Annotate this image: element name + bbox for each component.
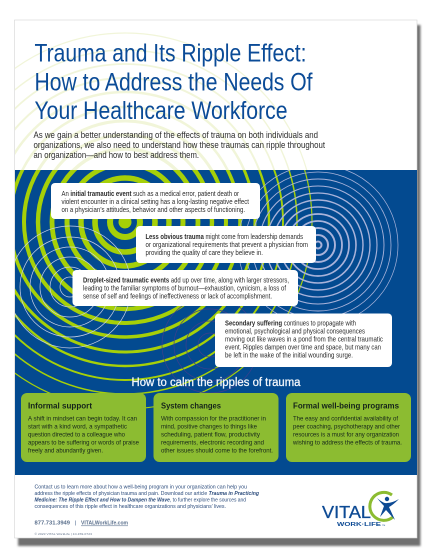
card: less obvious trauma — [136, 226, 316, 263]
footer phone and website — [34, 520, 128, 526]
box: formal well-being programs: resources is a must for any organization — [293, 432, 399, 438]
logo: Vital WorkLife: VITAL — [322, 502, 371, 522]
card: secondary suffering — [215, 314, 392, 367]
box: system changes: With compassion for the practitioner in — [161, 416, 266, 422]
card: initial traumatic event: An initial tramautic event such as a medical error, patient death or — [62, 189, 239, 198]
box: informal support — [21, 393, 146, 462]
box: system changes: System changes — [161, 400, 221, 410]
card: less obvious trauma: or organizational requirements that prevent a physician from — [146, 240, 308, 249]
footer contact text: Contact us to learn more about how a well-being program in your organization can help you — [34, 484, 247, 490]
footer phone and website: VITALWorkLife.com — [81, 520, 128, 526]
heading: how to calm: How to calm the ripples of trauma — [132, 375, 301, 389]
box: system changes: requirements, electronic recording and — [161, 440, 264, 446]
card: secondary suffering: be left in the wake of the initial wounding surge. — [225, 350, 353, 360]
box: formal well-being programs: peer coaching, psychotherapy and other — [293, 424, 401, 430]
card: droplet-sized traumatic events: leading to the familiar symptoms of burnout—exhaustion, cynicism, a loss of — [83, 284, 287, 292]
footer contact text — [34, 484, 260, 510]
box: formal well-being programs — [286, 393, 411, 462]
blue ripple panel — [15, 170, 417, 475]
card: secondary suffering: moving out like waves in a pond from the central traumatic — [225, 334, 383, 344]
copyright: © 2023 VITAL WorkLife | 10-159-0723 — [34, 532, 93, 536]
intro text: As we gain a better understanding of the effects of trauma on both individuals and — [34, 130, 318, 140]
footer contact text: consequences of this ripple effect in healthcare organizations and physicians’ lives. — [34, 504, 226, 510]
box: informal support: appears to be suffering or words of praise — [28, 440, 139, 446]
intro text: an organization—and how to best address them. — [34, 150, 199, 160]
box: informal support: Informal support — [28, 400, 92, 410]
box: formal well-being programs: The easy and confidential availability of — [293, 416, 398, 422]
box: informal support: question directed to a colleague who — [28, 432, 125, 438]
pale ripple rings, left — [9, 226, 131, 348]
logo: Vital WorkLife: TM — [382, 525, 385, 527]
box: formal well-being programs: wishing to address the effects of trauma. — [292, 440, 402, 446]
box: system changes: scheduling, patient flow, productivity — [161, 432, 261, 438]
card: initial traumatic event: on a physician’s attitudes, behavior and other aspects of functioning. — [62, 205, 245, 214]
card: less obvious trauma: Less obvious trauma might come from leadership demands — [146, 232, 303, 241]
title — [34, 40, 313, 125]
box: informal support: start with a kind word, a sympathetic — [28, 424, 128, 430]
box: system changes: other issues should come to the forefront. — [161, 448, 273, 454]
card: droplet-sized traumatic events: sense of self and feelings of ineffectiveness or lack of accomplishment. — [83, 292, 272, 300]
box: informal support: A shift in mindset can begin today. It can — [28, 416, 137, 422]
footer contact text: address the ripple effects of physician trauma and pain. Download our article Trauma in Practicing — [34, 491, 260, 497]
logo: Vital WorkLife — [322, 492, 399, 528]
card: initial traumatic event — [51, 183, 260, 219]
card: less obvious trauma: providing the quality of care they believe in. — [146, 248, 263, 257]
lavender ripple rings, right — [240, 170, 398, 314]
footer contact text: Medicine: The Ripple Effect and How to Dampen the Wave, to further explore the sources and — [34, 498, 246, 504]
purple ripple rings, bottom centre — [162, 306, 253, 393]
title: How to Address the Needs Of — [34, 68, 313, 96]
card: initial traumatic event: violent encounter in a clinical setting has a long-lasting negative effect — [62, 197, 250, 206]
box: formal well-being programs: Formal well-being programs — [293, 400, 399, 410]
card: droplet-sized traumatic events — [72, 270, 298, 306]
card: secondary suffering: event. Ripples dampen over time and space, but many can — [225, 342, 381, 352]
footer phone and website: | — [75, 520, 76, 526]
faint ripple rings behind header — [15, 32, 308, 170]
box: informal support: freely and abundantly given. — [28, 448, 103, 454]
title: Trauma and Its Ripple Effect: — [34, 40, 306, 68]
card: secondary suffering: Secondary suffering continues to propagate with — [225, 318, 356, 328]
title: Your Healthcare Workforce — [34, 97, 288, 125]
green ripple rings — [15, 170, 313, 408]
box: system changes — [154, 393, 278, 462]
box: system changes: mind, positive changes to things like — [161, 424, 257, 430]
logo: Vital WorkLife: WORK·LIFE — [337, 522, 381, 528]
intro text: organizations, we also need to understand how these traumas can ripple throughout — [34, 140, 325, 150]
card: secondary suffering: emotional, psychological and physical consequences — [225, 326, 365, 336]
intro text — [34, 130, 325, 160]
footer phone and website: 877.731.3949 — [34, 520, 70, 526]
card: droplet-sized traumatic events: Droplet-sized traumatic events add up over time, along with larger stressors, — [83, 276, 289, 284]
